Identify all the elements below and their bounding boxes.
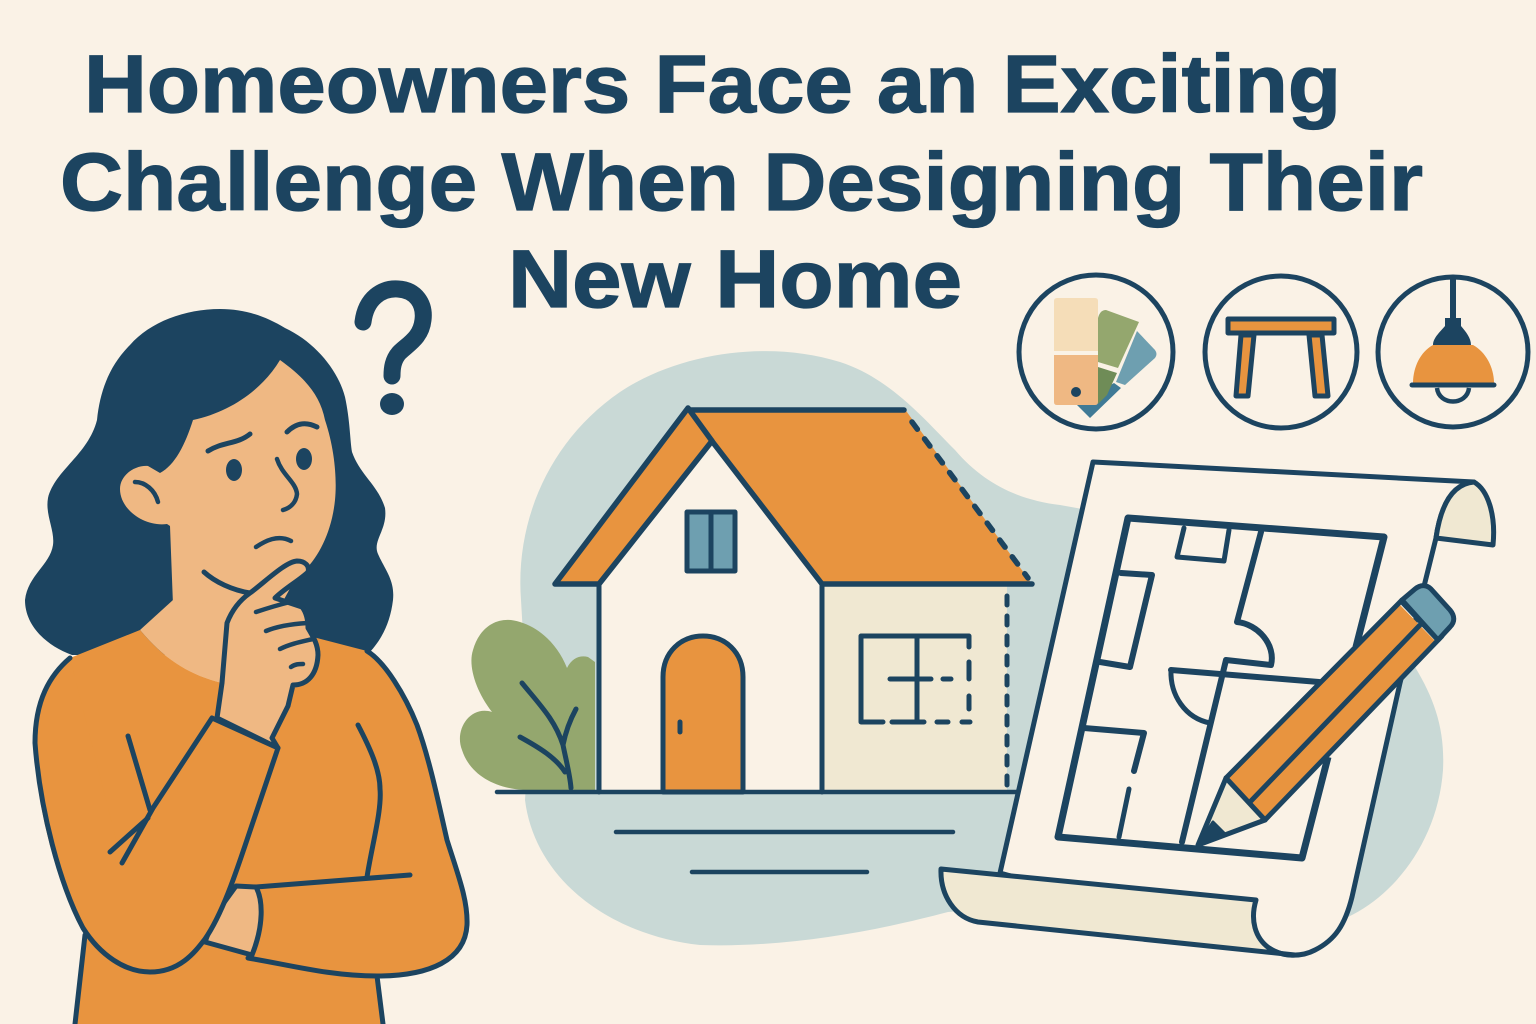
floor plan paper [941, 462, 1494, 955]
icon: stool [1205, 276, 1357, 428]
left roof [555, 408, 712, 584]
pencil [1198, 586, 1454, 845]
title: Homeowners Face an Exciting [84, 39, 1341, 130]
paper sheet [1000, 462, 1474, 955]
icon: question mark [363, 289, 423, 415]
side wall [822, 586, 1007, 792]
tucked hand [205, 886, 261, 955]
neck [140, 570, 300, 683]
plan walls [1058, 518, 1384, 858]
title [60, 39, 1423, 325]
ground lines [497, 792, 1018, 872]
title: New Home [508, 234, 962, 325]
jaw line [204, 572, 250, 593]
front wall [599, 441, 822, 792]
background blob [520, 351, 1443, 945]
roof [690, 408, 1032, 584]
icon: pendant lamp [1378, 277, 1528, 427]
nose and mouth [256, 459, 297, 547]
sweater outlines [75, 651, 467, 1024]
attic window [687, 512, 735, 571]
sweater [35, 630, 467, 1024]
sleeve lines [110, 725, 410, 887]
hair [25, 309, 393, 655]
door [663, 636, 743, 792]
eyes [226, 459, 242, 481]
house [497, 408, 1032, 872]
title: Challenge When Designing Their [60, 137, 1423, 228]
chin hand [217, 561, 318, 748]
side window [861, 636, 970, 722]
eyebrows [208, 424, 317, 451]
forearm outline [35, 658, 278, 972]
ear detail [135, 482, 158, 502]
woman thinking [25, 309, 467, 1024]
wall lines [599, 584, 822, 792]
icon: colour swatches [1019, 275, 1173, 429]
plant [460, 620, 595, 790]
finger lines [256, 602, 313, 667]
raised forearm [35, 658, 278, 972]
face [120, 360, 336, 605]
top curl [1436, 482, 1494, 545]
bottom curl [941, 869, 1295, 955]
